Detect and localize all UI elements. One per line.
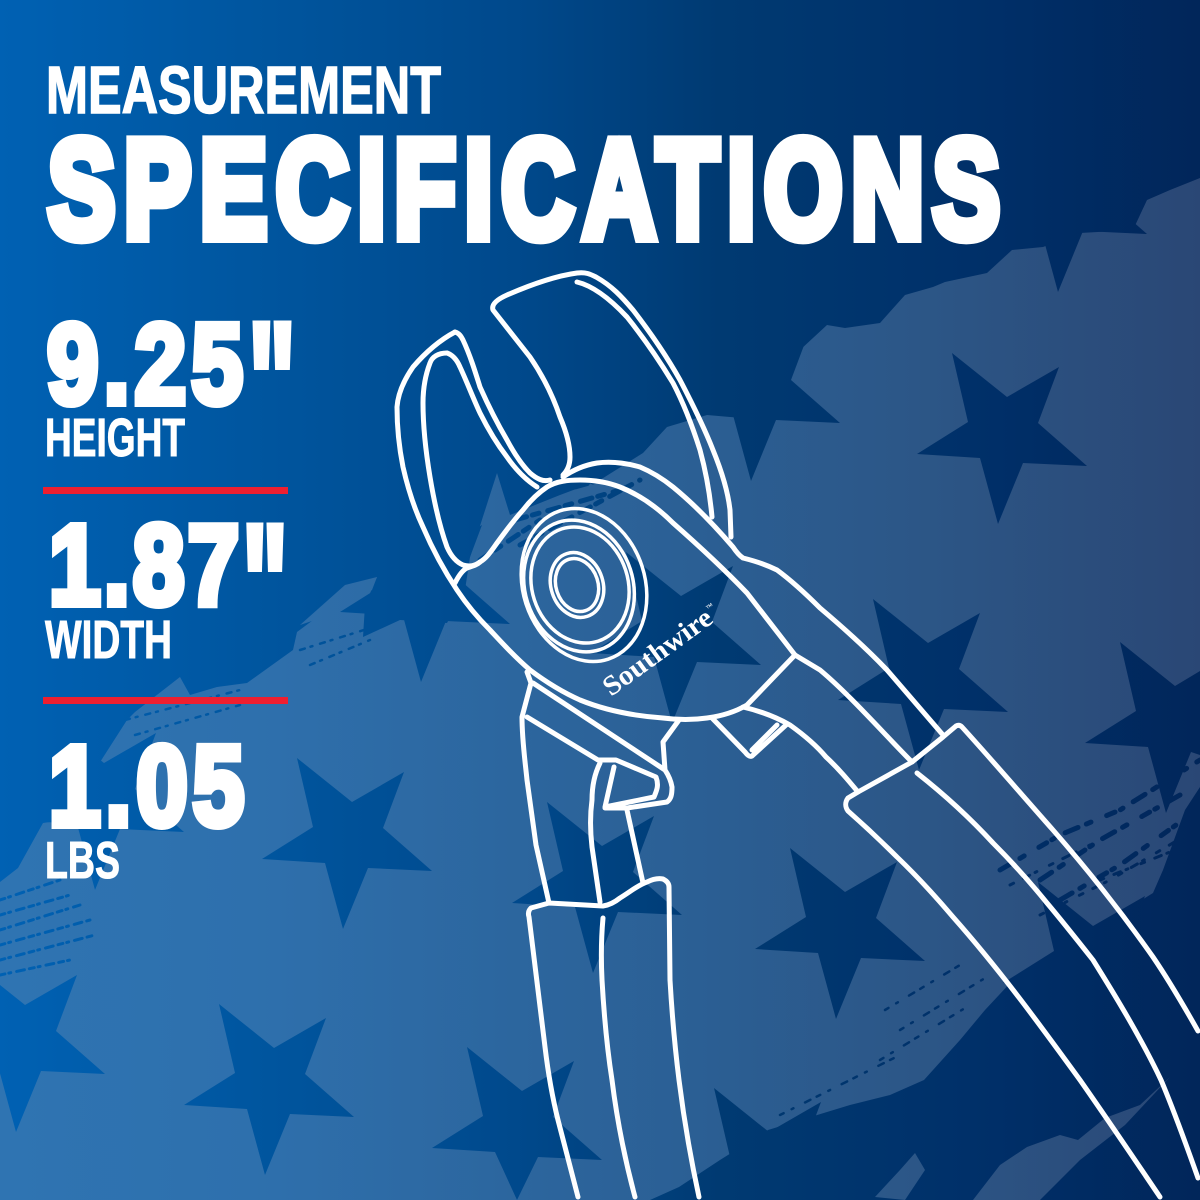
spec: height: " xyxy=(248,288,296,478)
spec: width: " xyxy=(242,490,288,680)
spec: weight: 1.05 xyxy=(49,722,244,849)
spec: weight: LBS xyxy=(45,832,120,890)
lower jaw and pivot body xyxy=(397,332,912,762)
spec: height: 9.25 xyxy=(47,300,243,427)
right handle sleeve xyxy=(846,725,1198,1197)
left handle sleeve xyxy=(528,879,699,1197)
title: specifications: SPECIFICATIONS xyxy=(48,111,1000,267)
divider: red xyxy=(43,487,288,494)
pivot top and upper handle xyxy=(563,462,943,735)
divider: red xyxy=(43,697,288,704)
spec: width: WIDTH xyxy=(45,610,172,670)
spec: height: HEIGHT xyxy=(45,408,185,468)
jaw inner contour xyxy=(423,353,795,655)
title: measurement: MEASUREMENT xyxy=(46,53,441,128)
upper jaw xyxy=(493,273,731,537)
brand logo: southwire: Southwire xyxy=(597,602,719,703)
brand logo: southwire: ™ xyxy=(704,601,716,613)
small pivot tab xyxy=(712,707,858,792)
pivot rings xyxy=(502,492,666,678)
cable cutter line drawing xyxy=(397,273,1198,1197)
spec: height xyxy=(45,288,296,478)
lower left handle neck xyxy=(522,672,679,903)
spec: width: 1.87 xyxy=(49,501,239,628)
spec: width xyxy=(45,490,288,680)
